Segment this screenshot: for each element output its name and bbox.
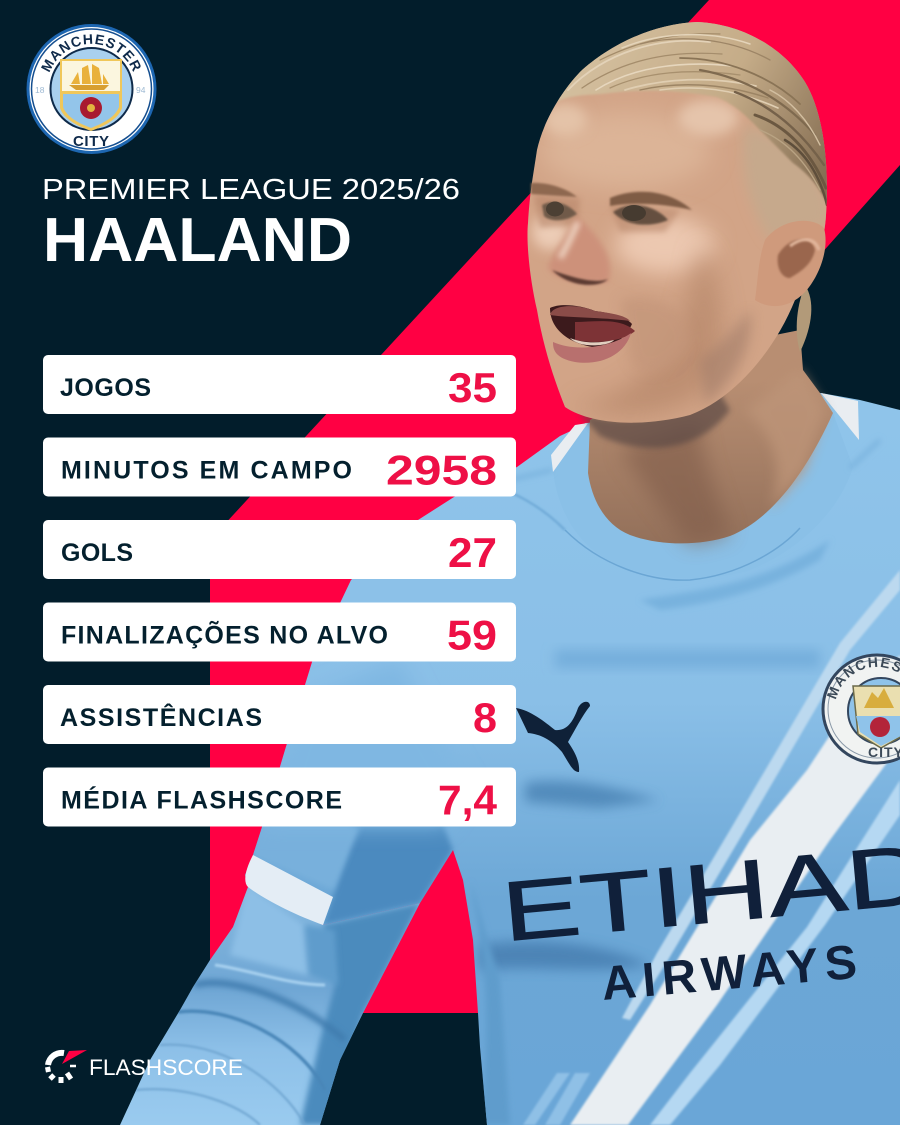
logo wordmark: FLASHSCORE [89,1055,243,1080]
flashscore logo [46,1050,243,1083]
ship [69,64,109,90]
sleeve shading [323,825,453,925]
row: média flashscore: 7,4 [438,776,498,824]
row: gols: GOLS [61,539,133,567]
club crest: Manchester City: 94 [136,85,146,95]
row: média flashscore: MÉDIA FLASHSCORE [61,786,342,814]
subtitle: PREMIER LEAGUE 2025/26 [42,174,460,206]
row: gols: 27 [448,529,497,576]
row: finalizações no alvo: FINALIZAÇÕES NO ALVO [61,620,388,650]
title: player name: HAALAND [43,206,352,275]
row: minutos em campo: MINUTOS EM CAMPO [61,456,352,484]
cheek light and jaw shading [615,217,715,273]
stats table [43,355,516,826]
forehead light [540,112,710,188]
crest shield [60,59,122,131]
eyes [542,202,577,220]
etihad sponsor text: ETIHAD [498,826,900,959]
eye sockets [534,195,580,228]
hair [557,22,827,203]
row: minutos em campo: 2958 [386,446,497,494]
row: assistências: ASSISTÊNCIAS [60,702,262,732]
neck [588,330,833,543]
row: assistências [43,685,516,744]
head and face [528,22,827,423]
eyebrows [531,183,577,197]
logo icon [46,1050,87,1083]
row: finalizações no alvo: 59 [447,612,497,658]
puma logo [516,702,590,772]
row: jogos: 35 [448,364,497,411]
shadow under jaw [578,385,730,448]
shirt collar band [553,413,853,578]
shirt club badge [822,654,900,764]
club crest: Manchester City [26,24,156,154]
crest lettering: MANCHESTER [41,34,141,72]
row: jogos [43,355,516,414]
row: gols [43,520,516,579]
white sleeve cuff [245,855,333,925]
back hair tuft [797,285,811,352]
club crest: Manchester City: CITY [73,133,110,150]
row: finalizações no alvo [43,602,516,662]
red diagonal shape [210,0,900,1013]
mouth [550,305,635,363]
row: média flashscore [43,768,516,826]
shirt stripes [570,655,900,1125]
nose [548,217,610,283]
torso and sleeve of sky-blue shirt [240,390,900,1125]
shirt folds [525,781,660,808]
row: jogos: JOGOS [60,374,151,402]
row: minutos em campo [43,438,516,496]
collar white trim [551,393,859,472]
hair fade on side [746,132,827,232]
forearm in rolled sleeve [110,880,430,1125]
airways sponsor text: AIRWAYS [599,936,859,1011]
row: assistências: 8 [473,694,497,741]
ear [755,221,826,306]
club crest: Manchester City: 18 [35,85,45,95]
